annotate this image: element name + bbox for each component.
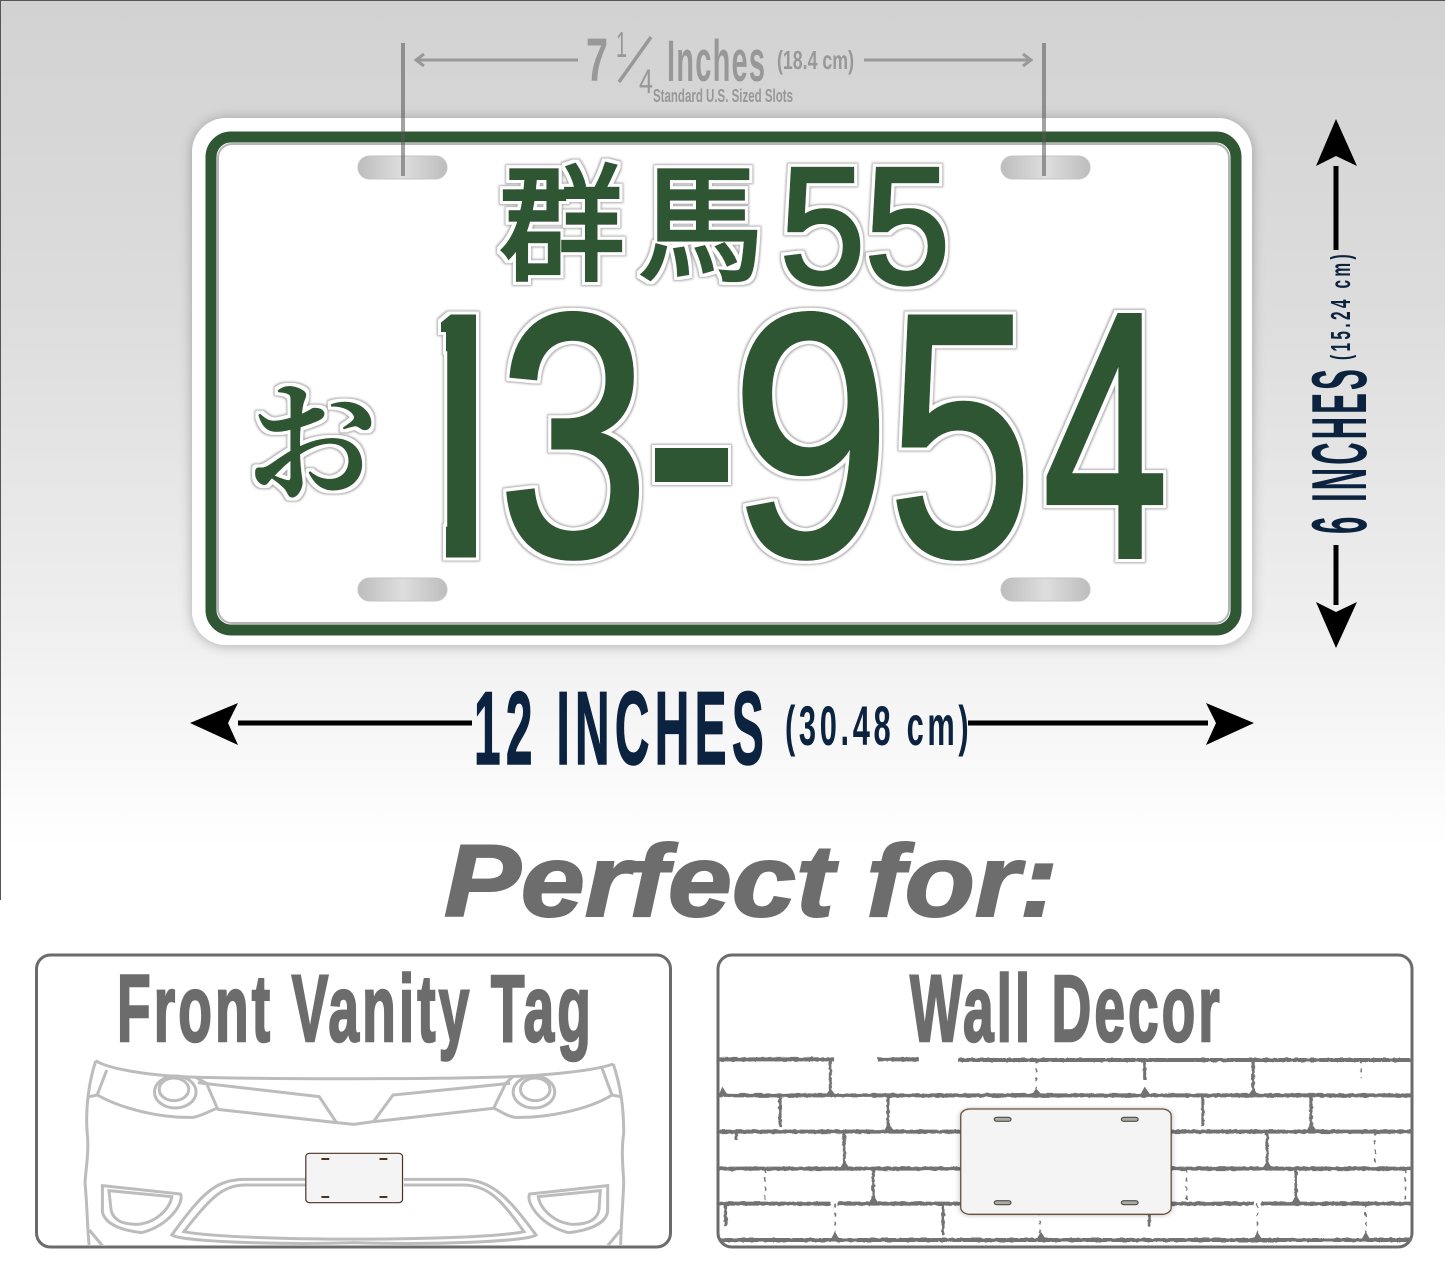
- slot guide lines: [403, 43, 1044, 176]
- heading: perfect for: Perfect for:: [444, 824, 1058, 938]
- prefecture text: [499, 125, 950, 318]
- plate body: [192, 118, 1252, 645]
- plate number: 9: [731, 243, 891, 629]
- height arrow: [1334, 166, 1338, 605]
- slot spacing dimension: [403, 24, 1044, 176]
- plate number: 4: [1044, 242, 1167, 629]
- height metric: (15.24 cm): [1325, 254, 1356, 360]
- plate number: 3: [498, 241, 649, 628]
- panel title: Front Vanity Tag: [117, 957, 591, 1062]
- license plate: [192, 118, 1252, 645]
- spacing label: Inches: [667, 28, 765, 94]
- brick wall: [719, 1059, 1412, 1240]
- height label: 6 INCHES: [1295, 369, 1383, 534]
- panel frame: [36, 955, 670, 1247]
- prefecture text: 55: [780, 133, 950, 318]
- prefecture text: 群: [499, 125, 625, 307]
- panel: wall decor: [718, 955, 1412, 1247]
- mini plate: [306, 1153, 403, 1203]
- spacing label: [586, 24, 854, 106]
- spacing label: 7: [586, 26, 608, 94]
- panel title: Wall Decor: [910, 957, 1220, 1062]
- spacing label: 4: [639, 63, 653, 101]
- spacing arrows: [416, 54, 1031, 66]
- wall plate: [961, 1109, 1171, 1214]
- panel frame: [718, 955, 1412, 1247]
- hiragana: お: [247, 340, 377, 527]
- car front outline: [85, 1061, 624, 1248]
- mounting slots: [358, 156, 1090, 601]
- plate green border: [210, 136, 1236, 630]
- width label: 12 INCHES: [474, 671, 764, 787]
- height dimension: [1295, 119, 1383, 648]
- width dimension: [190, 671, 1254, 787]
- plate number: 5: [888, 242, 1032, 629]
- spacing label: (18.4 cm): [777, 45, 854, 75]
- spacing label: Standard U.S. Sized Slots: [653, 86, 793, 106]
- plate number: [436, 306, 1168, 566]
- width arrow: [238, 720, 1208, 726]
- width metric: (30.48 cm): [785, 694, 969, 757]
- prefecture text: 馬: [638, 125, 764, 307]
- spacing label: 1: [616, 24, 627, 65]
- panel: front vanity tag: [36, 955, 670, 1248]
- page edge lines: [0, 0, 1445, 900]
- plate number: 1: [377, 243, 537, 629]
